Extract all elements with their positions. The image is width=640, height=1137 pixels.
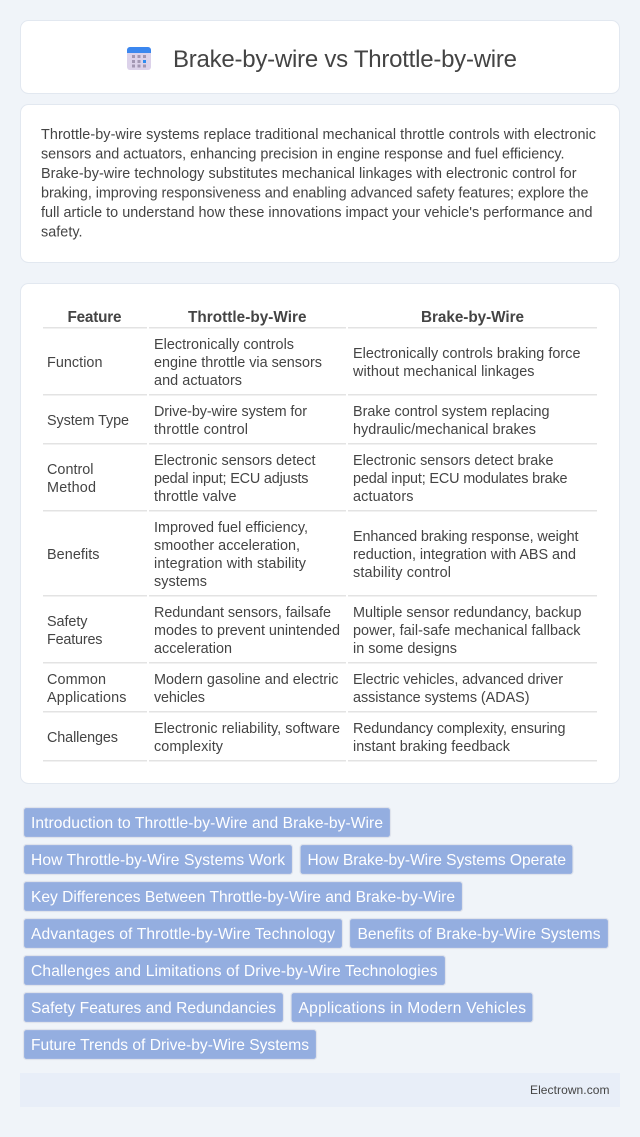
row: Safety Features: power, fail-safe mechanical fallback [353,623,581,639]
row: Safety Features: Features [47,632,102,648]
tag: brake systems: How Brake-by-Wire Systems Operate [308,852,566,869]
tag: benefits [350,918,608,948]
table header: Brake-by-Wire [421,309,524,326]
row: Common Applications: Electric vehicles, advanced driver [353,672,563,688]
table header [68,309,524,326]
row: Safety Features: acceleration [154,641,232,657]
row: Control Method: Method [47,480,96,496]
row: Common Applications: Common [47,672,106,688]
panel: intro text: safety. [41,224,82,240]
row: Control Method: Electronic sensors detect [154,453,316,469]
panel: comparison table [20,284,620,784]
row: Function: Electronically controls braking force [353,346,580,362]
row: Function: Electronically controls [154,337,294,353]
row: Benefits: Improved fuel efficiency, [154,520,308,536]
row: Challenges: Electronic reliability, software [154,721,340,737]
row: Function: Function [47,355,102,371]
tag: applications: Applications in Modern Vehicles [298,1000,526,1017]
row: Benefits: reduction, integration with ABS and [353,547,576,563]
footer [20,1073,620,1107]
row: Safety Features: modes to prevent unintended [154,623,340,639]
tag: key differences [24,882,462,912]
row: Function: engine throttle via sensors [154,355,322,371]
row: Benefits: Enhanced braking response, weight [353,529,578,545]
row: Challenges: instant braking feedback [353,739,511,755]
tag: introduction: Introduction to Throttle-by-Wire and Brake-by-Wire [31,815,383,832]
tag: brake systems [300,844,573,874]
row: Control Method: Control [47,462,94,478]
row: Control Method [47,453,568,505]
row: Common Applications: assistance systems (ADAS) [353,690,530,706]
tag: safety [24,992,284,1022]
row: Benefits: stability control [353,565,451,581]
panel: intro text [20,104,620,262]
tag: advantages [24,918,342,948]
tag: advantages: Advantages of Throttle-by-Wire Technology [31,926,335,943]
row: Safety Features: Safety [47,614,88,630]
panel: intro text: sensors and actuators, enhancing precision in engine response and fuel efficiency. [41,146,564,162]
row: System Type: System Type [47,413,129,429]
tag: benefits: Benefits of Brake-by-Wire Systems [358,926,601,943]
tag: throttle systems: How Throttle-by-Wire Systems Work [31,852,285,869]
row: Challenges: Challenges [47,730,118,746]
row: Safety Features: Multiple sensor redundancy, backup [353,605,582,621]
row: Benefits: smoother acceleration, [154,538,300,554]
row: System Type [47,404,550,438]
panel: intro text: Brake-by-wire technology substitutes mechanical linkages with electronic control for [41,166,577,182]
row: System Type: Brake control system replacing [353,404,550,420]
row: Benefits: Benefits [47,547,100,563]
panel: header [20,20,620,94]
table header: Throttle-by-Wire [188,309,306,326]
row: Common Applications [47,672,563,706]
row: System Type: hydraulic/mechanical brakes [353,422,536,438]
title: Brake-by-wire vs Throttle-by-wire [173,46,517,73]
row: Function [47,337,580,389]
row: Benefits: systems [154,574,207,590]
footer: Electrown.com [530,1083,610,1097]
table header: Feature [68,309,122,326]
row: Control Method: actuators [353,489,414,505]
row: Challenges: Redundancy complexity, ensuring [353,721,566,737]
tag: applications [291,992,533,1022]
topic tags [24,808,608,1060]
row: Common Applications: vehicles [154,690,205,706]
panel: intro text: full article to understand how these innovations impact your vehicle's performance and [41,205,592,221]
row: Safety Features [47,605,582,657]
row: System Type: throttle control [154,422,248,438]
tag: challenges: Challenges and Limitations of Drive-by-Wire Technologies [31,963,438,980]
row: Common Applications: Applications [47,690,126,706]
row: Control Method: pedal input; ECU adjusts [154,471,308,487]
panel: intro text: braking, improving responsiveness and enabling advanced safety features; explore the [41,186,588,202]
tag: introduction [24,808,390,838]
row: Function: without mechanical linkages [352,364,534,380]
panel: intro text: Throttle-by-wire systems replace traditional mechanical throttle controls with electronic [41,127,596,143]
tag: future trends: Future Trends of Drive-by-Wire Systems [31,1037,309,1054]
row: Control Method: Electronic sensors detect brake [353,453,554,469]
row: Common Applications: Modern gasoline and electric [154,672,338,688]
row: Function: and actuators [154,373,242,389]
row: Benefits: integration with stability [154,556,307,572]
row: Challenges: complexity [154,739,224,755]
tag: safety: Safety Features and Redundancies [31,1000,276,1017]
row: Challenges [47,721,566,755]
row: System Type: Drive-by-wire system for [154,404,307,420]
row: Control Method: pedal input; ECU modulates brake [353,471,568,487]
tag: challenges [24,956,446,986]
tag: future trends [24,1030,316,1060]
tag: key differences: Key Differences Between Throttle-by-Wire and Brake-by-Wire [31,889,455,906]
row: Benefits [47,520,578,590]
row: Control Method: throttle valve [154,489,236,505]
row: Safety Features: Redundant sensors, failsafe [154,605,331,621]
icon: calendar grid [127,47,151,70]
row: Safety Features: in some designs [353,641,457,657]
tag: throttle systems [24,844,292,874]
